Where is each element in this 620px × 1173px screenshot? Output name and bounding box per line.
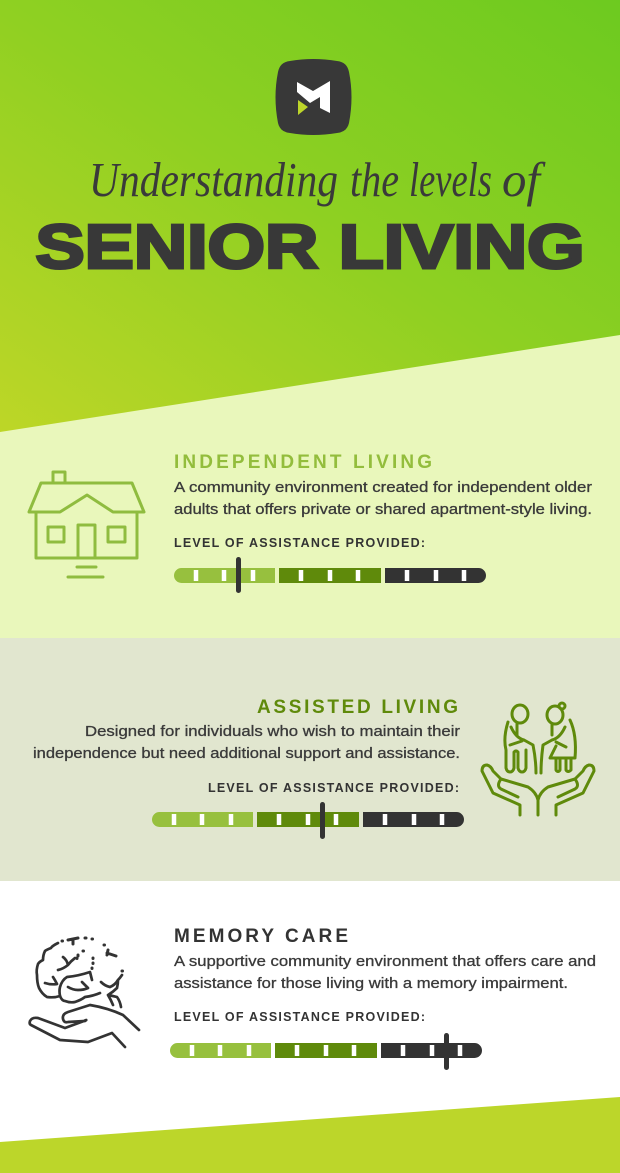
title main line: SENIOR LIVING <box>36 213 584 282</box>
description <box>174 480 592 518</box>
description: assistance for those living with a memory impairment. <box>174 976 568 992</box>
heading: ASSISTED LIVING <box>257 697 458 718</box>
title script line: levels <box>409 152 492 207</box>
assistance scale <box>170 1033 482 1070</box>
description: independence but need additional support and assistance. <box>33 746 460 762</box>
heading: INDEPENDENT LIVING <box>174 452 432 473</box>
panel: assisted living <box>0 638 620 881</box>
assistance label: LEVEL OF ASSISTANCE PROVIDED: <box>174 1010 425 1024</box>
panel: independent living <box>0 335 620 640</box>
description: Designed for individuals who wish to maintain their <box>85 724 460 740</box>
icon: seniors in hands <box>482 703 594 815</box>
logo <box>276 59 352 135</box>
assistance scale <box>174 557 486 593</box>
description: adults that offers private or shared apartment-style living. <box>174 502 592 518</box>
panel: memory care <box>0 881 620 1173</box>
title script line <box>89 152 546 207</box>
description: A community environment created for independent older <box>174 480 592 496</box>
header background <box>0 0 620 440</box>
assistance label: LEVEL OF ASSISTANCE PROVIDED: <box>208 781 459 795</box>
icon: house <box>29 472 144 577</box>
footer band <box>0 1097 620 1173</box>
description <box>174 954 596 992</box>
icon: brain in hand <box>30 938 139 1047</box>
description <box>33 724 460 762</box>
description: A supportive community environment that offers care and <box>174 954 596 970</box>
assistance scale <box>152 802 464 839</box>
title script line: of <box>502 152 546 207</box>
title script line: Understanding <box>89 152 338 207</box>
heading: MEMORY CARE <box>174 926 348 947</box>
assistance label: LEVEL OF ASSISTANCE PROVIDED: <box>174 536 425 550</box>
title script line: the <box>350 152 399 207</box>
